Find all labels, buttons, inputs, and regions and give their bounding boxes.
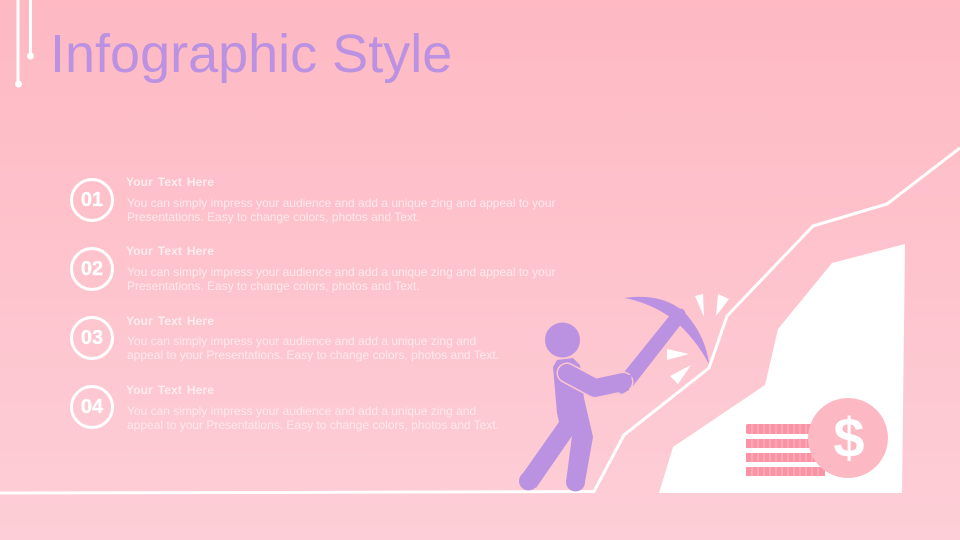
item 04 body	[127, 404, 499, 432]
item 02	[70, 244, 556, 293]
pickaxe head	[624, 297, 709, 364]
badge 04: 04	[81, 396, 103, 418]
item 03	[70, 314, 499, 362]
item 01 heading: Your Text Here	[126, 175, 214, 189]
item 04	[70, 383, 499, 432]
white mountain	[659, 244, 905, 493]
item 02 body	[127, 265, 556, 293]
item 03 body: appeal to your Presentations. Easy to change colors, photos and Text.	[127, 348, 499, 362]
item 01 body: You can simply impress your audience and add a unique zing and appeal to your	[127, 196, 556, 210]
title: Infographic Style	[50, 24, 452, 84]
arm	[567, 373, 623, 388]
rising white line	[0, 148, 960, 493]
item 03 body	[127, 334, 499, 362]
head	[545, 322, 580, 358]
miner figure with pickaxe	[519, 297, 709, 492]
item 01 body	[127, 196, 556, 224]
item 03 body: You can simply impress your audience and add a unique zing and	[127, 334, 476, 348]
item 01	[70, 175, 556, 224]
item 03 heading: Your Text Here	[126, 314, 214, 328]
badge 01	[70, 178, 114, 222]
right foot	[566, 472, 585, 492]
torso, hips and legs	[521, 358, 593, 488]
hand	[616, 375, 632, 394]
decorative top-left pins	[15, 0, 34, 88]
badge 01: 01	[81, 189, 103, 211]
coin stack	[746, 424, 826, 476]
item 04 heading: Your Text Here	[126, 383, 214, 397]
item 02 heading: Your Text Here	[126, 244, 214, 258]
left foot	[519, 472, 538, 490]
badge 02: 02	[81, 258, 103, 280]
item 04 body: appeal to your Presentations. Easy to change colors, photos and Text.	[127, 418, 499, 432]
impact sparks	[667, 294, 729, 384]
badge 02	[70, 247, 114, 291]
item 02 body: You can simply impress your audience and add a unique zing and appeal to your	[127, 265, 556, 279]
item 02 body: Presentations. Easy to change colors, photos and Text.	[127, 279, 420, 293]
item 04 body: You can simply impress your audience and add a unique zing and	[127, 404, 476, 418]
dollar coin	[808, 398, 888, 478]
dollar coin: $	[833, 406, 865, 469]
item 01 body: Presentations. Easy to change colors, photos and Text.	[127, 210, 420, 224]
badge 03: 03	[81, 327, 103, 349]
badge 03	[70, 316, 114, 360]
pickaxe handle	[621, 309, 686, 386]
badge 04	[70, 385, 114, 429]
